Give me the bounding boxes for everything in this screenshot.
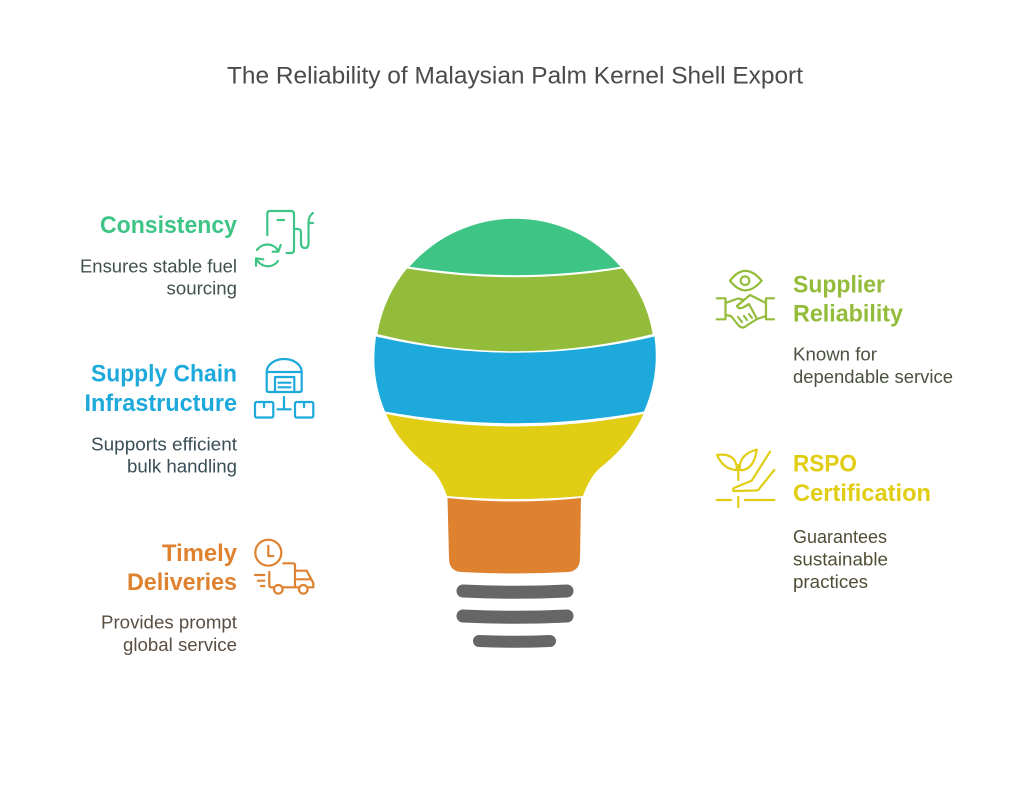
heading: Deliveries — [127, 569, 237, 596]
heading — [84, 361, 237, 417]
item: supplier reliability — [717, 271, 953, 387]
icon: clock and truck — [255, 540, 313, 594]
description: practices — [793, 572, 868, 592]
description — [80, 256, 237, 298]
heading — [127, 540, 238, 596]
item: timely deliveries — [101, 540, 313, 655]
description — [91, 434, 237, 476]
title: The Reliability of Malaysian Palm Kernel Shell Export — [227, 62, 803, 90]
description: Known for — [793, 345, 877, 365]
icon: plant in hand — [717, 450, 774, 507]
heading: Supplier — [793, 272, 885, 299]
bulb segment: yellow — [386, 414, 644, 499]
heading: RSPO — [793, 450, 857, 478]
description — [101, 612, 237, 655]
description: bulk handling — [127, 456, 237, 476]
heading: Reliability — [793, 301, 904, 328]
heading — [793, 272, 904, 328]
item: supply chain infrastructure — [84, 359, 313, 476]
description: Provides prompt — [101, 612, 237, 632]
description — [793, 527, 888, 592]
heading: Consistency — [100, 212, 238, 239]
icon: warehouse and boxes — [255, 359, 313, 418]
description: Ensures stable fuel — [80, 256, 237, 276]
description: Supports efficient — [91, 434, 237, 454]
description — [793, 345, 953, 387]
item: consistency — [80, 211, 313, 298]
description: global service — [123, 635, 237, 655]
description: sourcing — [166, 278, 237, 298]
description: sustainable — [793, 550, 888, 570]
light bulb — [374, 219, 656, 648]
heading: Supply Chain — [91, 361, 237, 388]
bulb segment: blue — [374, 336, 656, 423]
heading: Certification — [793, 480, 931, 507]
heading: Timely — [162, 540, 238, 567]
icon: eye and handshake — [717, 271, 774, 328]
icon: fuel pump with refresh — [256, 211, 313, 266]
item: rspo certification — [717, 450, 931, 592]
bulb segment: orange — [448, 498, 581, 574]
bulb segment: olive — [377, 268, 653, 351]
description: Guarantees — [793, 527, 887, 547]
heading — [793, 450, 931, 507]
bulb segment: green — [410, 219, 620, 275]
description: dependable service — [793, 367, 953, 387]
heading: Infrastructure — [84, 390, 237, 417]
bulb base bars — [457, 584, 574, 648]
